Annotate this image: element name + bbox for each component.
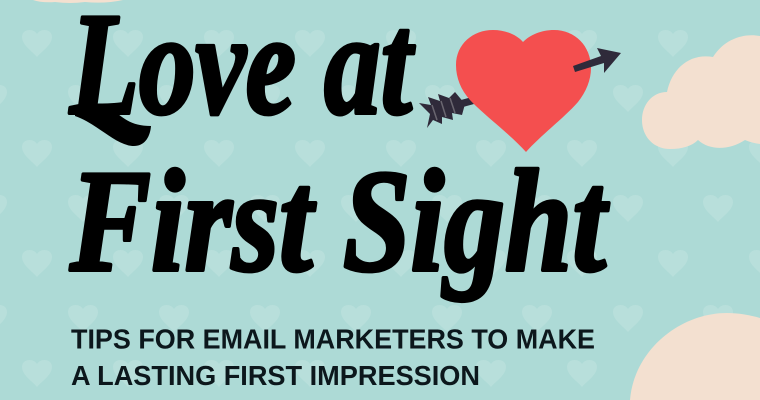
cloud: upper right [642,35,760,149]
arrow tail and fletching [419,92,474,128]
subtitle line 2: A LASTING FIRST IMPRESSION [71,360,480,391]
cloud: bottom right [630,313,760,400]
arrow head and shaft [573,48,621,73]
title: Love at First Sight [68,0,610,302]
subtitle line 1: TIPS FOR EMAIL MARKETERS TO MAKE [71,324,595,354]
title line 2: First Sight [69,140,610,302]
cloud: top left edge [33,0,123,3]
icon: red heart [456,30,591,152]
title flourish under the L [75,114,151,146]
subtitle [71,324,595,391]
